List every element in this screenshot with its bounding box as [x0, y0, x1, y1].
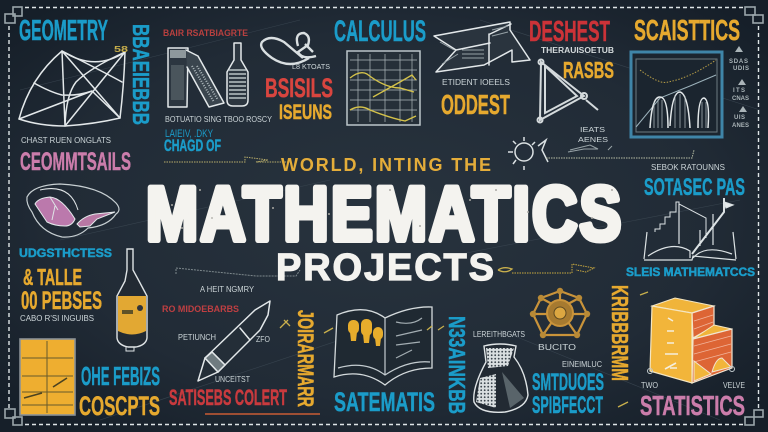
panel: bone cross section: [19, 148, 131, 323]
yellow heading: ODDEST: [441, 89, 510, 120]
chart: curves on grid: [347, 51, 420, 125]
panel: pen and labels: [162, 285, 320, 414]
arrow: dotted upper right: [546, 150, 694, 158]
title: MATHEMATICS: [146, 171, 623, 256]
arrow: dashed center left: [176, 268, 300, 276]
panel: gear: [530, 288, 604, 419]
caption: EINEIMLUC: [562, 360, 602, 369]
caption: TWO: [641, 381, 658, 390]
caption: SEBOK RATOUNNS: [651, 163, 725, 172]
icon: anatomical shape: [27, 184, 119, 237]
caption: UNCEITST: [215, 375, 250, 384]
caption: ETIDENT IOEELS: [442, 78, 510, 87]
blue subheading: UDGSTHCTESS: [19, 246, 112, 260]
icon: yellow table: [20, 339, 75, 415]
panel: statistics chart: [631, 15, 740, 137]
red heading: DESHEST: [529, 16, 610, 48]
icon: yellow curl: [498, 268, 512, 272]
caption: THERAUISOETUB: [541, 46, 614, 55]
arrow: dotted right of title: [512, 264, 594, 273]
caption: VELVE: [723, 381, 745, 390]
panel: geometry: [19, 15, 129, 145]
icon: prism: [434, 22, 530, 72]
icon: bottle: [227, 43, 248, 106]
icon: wireframe polyhedron: [19, 51, 125, 126]
annotation: L8 KTOATS: [292, 64, 330, 71]
small annotation: 58: [114, 45, 129, 54]
blue subheading: SLEIS MATHEMATCCS: [626, 265, 755, 279]
panel: yellow grid: [20, 339, 160, 421]
side notes: small glyph captions: ITS: [733, 88, 745, 94]
panel: triangle: [529, 16, 614, 144]
heading: geometry: GEOMETRY: [19, 15, 108, 47]
caption: BUCITO: [538, 343, 576, 352]
red heading: BAIR RSATBIAGRTE: [163, 28, 248, 38]
side notes: small glyph captions: CNAS: [732, 96, 749, 102]
sketch: small wave: [568, 145, 612, 152]
side notes: small glyph captions: [729, 46, 749, 129]
caption: A HEIT NGMRY: [200, 285, 255, 294]
blue heading: SATEMATIS: [334, 387, 435, 417]
icon: dotted jar: [474, 344, 528, 412]
panel: knot and red labels: [261, 33, 333, 124]
overline: WORLD, INTING THE: [281, 155, 491, 175]
heading: CEOMMTSAILS: [20, 148, 131, 176]
red heading: BSISILS: [265, 73, 333, 103]
chart: framed arches: [631, 52, 722, 137]
red caption: RO MIDOEBARBS: [162, 304, 239, 314]
icon: drawing pen: [198, 301, 270, 381]
subtitle: PROJECTS: [276, 247, 494, 289]
panel: prism and odd label: [434, 22, 530, 120]
blue heading: SMTDUOES: [532, 369, 604, 396]
side notes: small glyph captions: ANES: [732, 123, 749, 129]
caption: CHAST RUEN ONGLATS: [21, 136, 111, 145]
side notes: small glyph captions: UIS: [734, 115, 745, 121]
panel: stairs on open book: [626, 163, 755, 279]
icon: open book: [334, 307, 432, 385]
panel: calculus: [334, 15, 426, 125]
icon: isometric brick block: [648, 298, 734, 383]
icon: triangle with nodes: [538, 60, 598, 122]
vertical label: blue: BBAEIEBBB: [128, 24, 154, 125]
underline: [205, 413, 320, 415]
caption: LEREITHBGATS: [473, 330, 525, 339]
panel: jar: [473, 330, 528, 412]
red heading: SATISEBS COLERT: [169, 385, 287, 410]
icon: book with staircase: [644, 198, 736, 260]
yellow heading: ISEUNS: [279, 101, 332, 124]
vertical label: yellow right: KRIBBBRMM: [607, 285, 633, 381]
caption: AENES: [578, 137, 608, 144]
panel: statistics block: [640, 298, 745, 421]
icon: gear wheel: [530, 288, 590, 338]
panel: books and bottle: [163, 28, 273, 155]
heading: calculus: CALCULUS: [334, 15, 426, 48]
blue heading: OHE FEBIZS: [81, 361, 160, 391]
blue subheading: CHAGD OF: [164, 136, 221, 155]
icon: medicine bottle: [117, 249, 147, 351]
side notes: small glyph captions: UDIS: [733, 66, 749, 72]
main title group: [146, 155, 623, 289]
caption: BOTUATIO SING TBOO ROSCY: [165, 115, 273, 124]
chalk speckles: [171, 189, 613, 229]
yellow heading: & TALLE: [23, 264, 82, 290]
panel: open book: [334, 307, 435, 417]
icon: loop knot: [261, 33, 316, 64]
yellow heading: 00 PEBSES: [21, 287, 102, 315]
side notes: small glyph captions: SDAS: [729, 59, 748, 65]
caption: IEATS: [580, 127, 605, 134]
yellow heading: RASBS: [563, 57, 614, 83]
icon: sun: [508, 137, 548, 170]
annotation: ZFO: [256, 335, 270, 344]
small yellow doodles: [280, 292, 648, 407]
caption: PETIUNCH: [178, 333, 216, 342]
blue note: LAIEIV, .DKY: [165, 128, 213, 140]
blue heading: SPIBFECCT: [532, 392, 603, 419]
caption: CABO R'SI INGUIBS: [20, 314, 94, 323]
yellow heading: COSCPTS: [79, 391, 160, 421]
arrow: dotted upper left: [164, 157, 290, 162]
icon: standing book: [168, 48, 224, 107]
